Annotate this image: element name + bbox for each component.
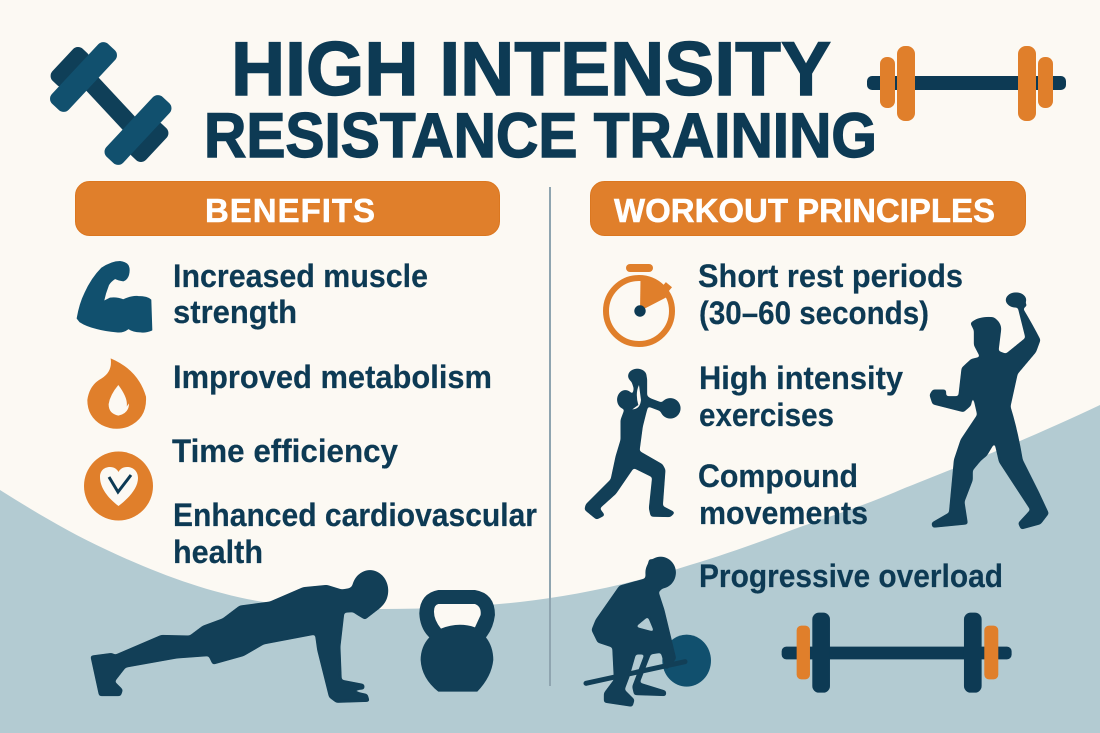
- heading: workout principles: WORKOUT PRINCIPLES: [614, 192, 995, 229]
- figure: push-up: [92, 570, 388, 702]
- text: high intensity exercises: High intensity: [699, 360, 903, 396]
- text: high intensity exercises: exercises: [699, 397, 834, 433]
- icon: flexed arm: [77, 262, 152, 332]
- text: increased muscle strength: Increased muscle: [173, 258, 428, 294]
- figure: flexing man: [931, 292, 1048, 528]
- title: [204, 27, 877, 171]
- text: compound movements: [698, 458, 868, 531]
- heading: benefits: BENEFITS: [205, 192, 375, 229]
- text: time efficiency: Time efficiency: [172, 433, 398, 469]
- title: HIGH INTENSITY: [231, 27, 831, 112]
- icon: heart badge: [84, 452, 153, 520]
- text: short rest periods: [698, 258, 963, 331]
- icon: orange barbell: [867, 46, 1066, 121]
- icon: flame: [87, 358, 146, 429]
- text: short rest periods: Short rest periods: [698, 258, 963, 294]
- heading: workout principles: [590, 182, 1026, 236]
- icon: stopwatch: [606, 264, 672, 344]
- text: improved metabolism: Improved metabolism: [173, 359, 492, 395]
- text: high intensity exercises: [699, 360, 903, 433]
- title: RESISTANCE TRAINING: [204, 101, 877, 171]
- figure: deadlift: [586, 557, 711, 706]
- text: compound movements: movements: [699, 495, 868, 531]
- panel: benefits: [76, 182, 537, 570]
- text: increased muscle strength: [173, 258, 428, 330]
- text: enhanced cardiovascular health: [173, 497, 537, 570]
- text: progressive overload: Progressive overload: [699, 558, 1003, 594]
- text: short rest periods: (30–60 seconds): [699, 295, 929, 331]
- icon: kettlebell: [419, 590, 495, 692]
- panel: workout principles: [586, 182, 1048, 706]
- text: compound movements: Compound: [698, 458, 858, 494]
- figure: kettlebell lunge: [586, 369, 681, 518]
- text: increased muscle strength: strength: [173, 294, 297, 330]
- icon: navy barbell: [782, 613, 1012, 693]
- text: enhanced cardiovascular health: Enhanced cardiovascular: [173, 497, 537, 533]
- icon: tilted dumbbell: [47, 39, 174, 168]
- text: enhanced cardiovascular health: health: [173, 534, 263, 570]
- heading: benefits: [76, 182, 500, 236]
